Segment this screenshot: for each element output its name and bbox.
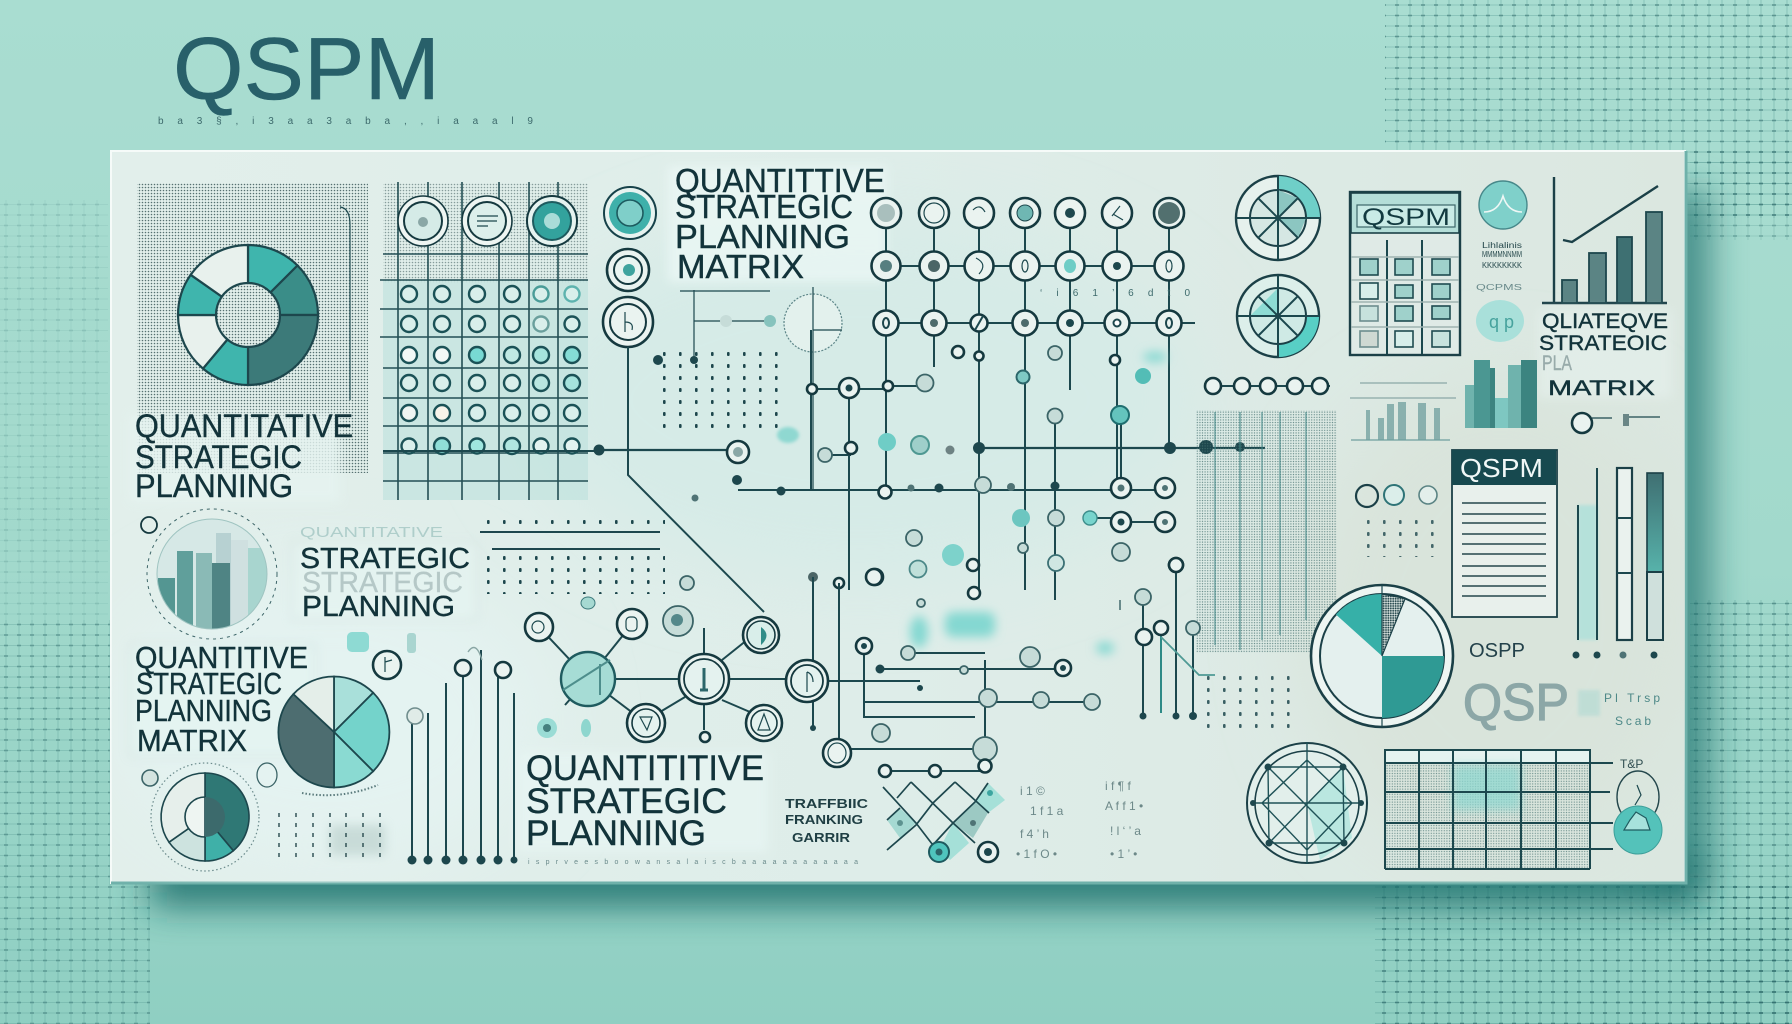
- corner teal badges: T&P: [1620, 757, 1643, 771]
- dotted backdrop: [137, 183, 368, 473]
- small caption: MMMMNNMM: [1482, 250, 1522, 259]
- calculator label: QSPM: [1362, 204, 1450, 231]
- small glyph specks: ‘ i 6 1 ’ 6 d t 0: [1040, 288, 1190, 299]
- lollipop cluster: [1120, 558, 1302, 729]
- tick field: [279, 813, 385, 863]
- calculator cell lines: [1351, 257, 1459, 327]
- panel: radar dials: [1205, 176, 1330, 394]
- bold small caption: GARRIR: [792, 830, 851, 845]
- lower teal smudges: [910, 352, 1167, 654]
- radar dial bottom: [1237, 275, 1319, 357]
- shield glyph: q p: [1489, 312, 1514, 332]
- hub teal node: [561, 652, 615, 706]
- pie dotted arc: [302, 785, 378, 795]
- panel: node network: [594, 198, 1265, 654]
- panel tonal blotches: [110, 220, 1700, 870]
- thin bracket: [340, 207, 350, 400]
- ring with stub: [1572, 413, 1660, 433]
- heading: quantitive strategic planning matrix: [668, 162, 886, 285]
- vertical gauges: [1572, 468, 1663, 658]
- heading: quantitive strategic planning matrix left: STRATEGIC: [136, 666, 282, 701]
- small caption: Lihlalinis: [1482, 241, 1522, 250]
- panel: right icon column: [1476, 181, 1527, 342]
- heading: quantitive strategic planning matrix: PLANNING: [675, 218, 850, 255]
- calculator grid: [1387, 240, 1422, 354]
- scattered glyph field: i f ¶ f: [1105, 779, 1131, 793]
- teal bar cluster: [1465, 360, 1537, 428]
- scattered glyph field: [1016, 779, 1143, 861]
- textured table: [1385, 749, 1613, 869]
- small caption: QCPMS: [1476, 283, 1522, 292]
- diamond lattice: [883, 782, 1005, 862]
- node row 1: [871, 198, 1184, 228]
- calculator display: [1357, 205, 1455, 227]
- panel shadow: [150, 190, 1710, 906]
- lower wiring: [810, 569, 1100, 777]
- dial: outlined: [603, 297, 653, 347]
- segmented pie chart: [142, 763, 277, 871]
- heading: quantitative strategic planning: PLANNING: [135, 468, 293, 504]
- heading: strategic planning: STRATEGIC: [300, 543, 470, 575]
- heading: strategic planning: PLANNING: [302, 591, 455, 623]
- heading: quantitive strategic planning matrix: STRATEGIC: [675, 188, 853, 225]
- main horizontal wire: [599, 448, 1265, 450]
- heading: quantitive strategic planning lower: QUANTITITIVE: [526, 749, 764, 788]
- heading: strategic matrix: QLIATEQVE: [1542, 310, 1668, 333]
- stem markers: [653, 315, 776, 502]
- dial: teal: [604, 187, 656, 239]
- matrix row connector: [383, 450, 599, 452]
- small teal swatches: [347, 632, 416, 653]
- matrix top dials: [398, 196, 577, 246]
- small caption: [1476, 241, 1523, 292]
- text halo lower centre: [518, 752, 768, 852]
- node row 2: [872, 252, 1184, 280]
- matrix circle cells: [401, 286, 580, 454]
- mini histogram: [1350, 383, 1456, 440]
- heading: strategic matrix: PLA: [1542, 352, 1572, 375]
- bold small caption: [785, 796, 869, 845]
- heading: strategic matrix: MATRIX: [1548, 377, 1655, 400]
- subtitle ticks: b a 3 § , i 3 a a 3 a b a , , i a a a l 9: [158, 116, 533, 127]
- panel: donut chart block: [130, 183, 368, 504]
- title: QSPM: [173, 19, 440, 118]
- network wires: [738, 213, 1195, 600]
- heading: quantitative strategic planning: STRATEGIC: [135, 439, 302, 475]
- hub teal droplets: [537, 597, 595, 738]
- left stems: [680, 290, 770, 357]
- diagonal connector: [628, 347, 764, 612]
- heading: quantitative strategic planning: QUANTITATIVE: [135, 408, 353, 444]
- heading: quantitive strategic planning matrix left: QUANTITIVE: [135, 640, 308, 675]
- dotted matrix backdrop: [383, 183, 588, 283]
- panel: dotted stripe field: [1196, 410, 1337, 653]
- teal matrix tint: [383, 280, 588, 500]
- lollipop row: [407, 648, 518, 864]
- text halo: [130, 414, 340, 502]
- teal badge: [1479, 181, 1527, 229]
- teal blob: [777, 427, 799, 443]
- document lines: [1462, 503, 1546, 596]
- heading: quantitive strategic planning matrix: QUANTITTIVE: [675, 162, 885, 199]
- scattered nodes: [594, 346, 1245, 590]
- clock dial: [784, 287, 842, 490]
- scattered glyph field: i 1 ©: [1020, 784, 1045, 798]
- panel: left dial column and diagonal connector: [603, 187, 764, 612]
- dashed dot rows: [480, 518, 665, 594]
- donut chart: [178, 245, 318, 385]
- panel: network hub: [525, 597, 828, 742]
- heading: strategic planning: [292, 542, 477, 623]
- panel: circle matrix: [380, 182, 599, 500]
- heading: quantitive strategic planning lower: STRATEGIC: [526, 782, 727, 821]
- small caption: KKKKKKKK: [1482, 261, 1523, 270]
- matrix grid lines: [380, 182, 588, 500]
- panel lower edge: [111, 151, 1686, 883]
- dot grid: [660, 350, 780, 434]
- calculator keys: [1360, 259, 1450, 347]
- document header label: QSPM: [1460, 453, 1543, 483]
- scattered glyph field: A f f 1 •: [1105, 799, 1143, 813]
- node row 3: [874, 310, 1182, 336]
- ring row: [1205, 378, 1330, 394]
- panel: left lower text and charts: [130, 509, 665, 871]
- radar dial top: [1236, 176, 1320, 260]
- hub spokes: [539, 624, 787, 730]
- corner teal badges: [1614, 757, 1662, 854]
- heading: quantitive strategic planning lower: PLANNING: [526, 814, 706, 853]
- bold small caption: TRAFFBIIC: [785, 796, 869, 811]
- heading: quantitive strategic planning matrix: MATRIX: [677, 248, 804, 285]
- scattered glyph field: 1 f 1 a: [1030, 804, 1064, 818]
- ring trio: [1356, 485, 1440, 557]
- scattered glyph field: f 4 ’ h: [1020, 827, 1049, 841]
- bar chart with trend: [1542, 177, 1667, 303]
- smudged label: Scab: [1615, 714, 1651, 728]
- heading: strategic planning: STRATEGIC: [302, 567, 463, 599]
- panel: central dot grid and clock: [653, 287, 842, 502]
- heading: quantitive strategic planning matrix left: PLANNING: [135, 693, 272, 728]
- heading: quantitive strategic planning matrix left: MATRIX: [137, 723, 247, 758]
- ghost text strip: QUANTITATIVE: [300, 524, 443, 541]
- panel: QSPM document: [1452, 450, 1557, 617]
- scattered glyph field: ! l ‘ ’ a: [1110, 824, 1141, 838]
- hub ring nodes: [525, 606, 828, 742]
- calculator header: [1351, 193, 1459, 233]
- heading: strategic matrix: [1538, 310, 1672, 400]
- teal pie chart: [278, 676, 389, 788]
- faint footer ticks: i s p r v e e s b o o w a n s a l a i s c b a a a a a a a a a a a a: [528, 859, 858, 866]
- bars in circle: [141, 509, 277, 639]
- main panel: [111, 151, 1685, 883]
- ring glyph: [373, 651, 401, 679]
- scattered glyph field: • 1 f O •: [1016, 847, 1057, 861]
- bold small caption: FRANKING: [785, 812, 863, 827]
- faded label: QSP: QSP: [1463, 674, 1569, 732]
- smudged label: [1578, 690, 1660, 728]
- large pie chart with ring: [1311, 585, 1453, 727]
- heading: quantitive strategic planning matrix left: [130, 640, 315, 758]
- heading: quantitative strategic planning: [135, 408, 353, 504]
- heading: quantitive strategic planning lower: [526, 749, 764, 853]
- dial: light: [607, 249, 649, 291]
- radar net: [1247, 742, 1367, 864]
- teal shield: [1476, 300, 1524, 342]
- label: OSPP: OSPP: [1469, 640, 1525, 662]
- scattered glyph field: • 1 ’ •: [1110, 847, 1137, 861]
- heading: strategic matrix: STRATEOIC: [1539, 332, 1667, 355]
- document header: [1452, 450, 1556, 485]
- panel: QSPM calculator: [1350, 192, 1460, 355]
- smudged label: Pl Trsp: [1604, 691, 1660, 705]
